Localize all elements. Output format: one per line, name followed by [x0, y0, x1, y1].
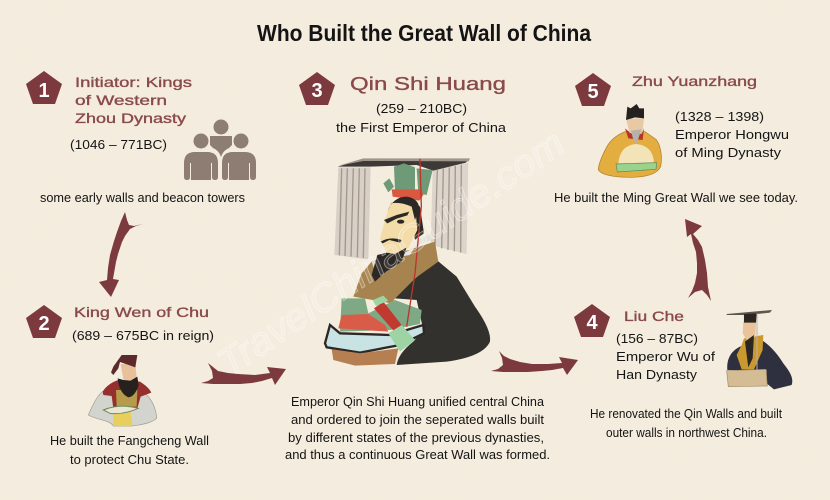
badge 1: 1	[38, 80, 50, 102]
description 3: Emperor Qin Shi Huang unified central China	[291, 394, 545, 409]
heading 2: King Wen of Chu	[74, 304, 209, 320]
dates 1: (1046 – 771BC)	[70, 137, 167, 152]
portrait: King Wen	[88, 355, 157, 426]
heading 5: Zhu Yuanzhang	[632, 73, 757, 89]
title: Who Built the Great Wall of China	[257, 20, 591, 46]
description 2: to protect Chu State.	[70, 452, 189, 467]
icon: group of people	[184, 120, 256, 180]
watermark: TravelChinaGuide.com	[210, 122, 572, 385]
dates 4	[616, 331, 715, 382]
description 2: He built the Fangcheng Wall	[50, 433, 209, 448]
panel: step 1 Western Zhou	[26, 71, 256, 205]
heading 4: Liu Che	[624, 308, 684, 324]
portrait: Qin Shi Huang	[325, 158, 490, 366]
description 4: outer walls in northwest China.	[606, 425, 767, 440]
dates 5: Emperor Hongwu	[675, 127, 789, 142]
portrait: Zhu Yuanzhang	[598, 104, 661, 177]
arrow: step 2 to 3	[201, 363, 286, 385]
arrow: step 4 to 5	[685, 219, 711, 301]
dates 4: Emperor Wu of	[616, 349, 715, 364]
badge 1	[26, 71, 62, 104]
description 1: some early walls and beacon towers	[40, 190, 245, 205]
dates 5: of Ming Dynasty	[675, 145, 781, 160]
badge 4	[574, 304, 610, 337]
badge 2: 2	[38, 313, 50, 335]
description 4	[590, 406, 782, 440]
description 3: and thus a continuous Great Wall was formed.	[285, 447, 550, 462]
description 4: He renovated the Qin Walls and built	[590, 406, 782, 421]
dates 5	[675, 109, 789, 160]
badge 3	[299, 72, 335, 105]
description 2	[50, 433, 209, 467]
description 5: He built the Ming Great Wall we see today.	[554, 190, 798, 205]
portrait: Liu Che	[727, 310, 792, 389]
dates 5: (1328 – 1398)	[675, 109, 764, 124]
heading 1: Zhou Dynasty	[75, 110, 186, 126]
heading 1	[75, 74, 192, 126]
arrow: step 3 to 4	[491, 351, 578, 375]
dates 4: (156 – 87BC)	[616, 331, 698, 346]
dates 3: (259 – 210BC)	[376, 101, 467, 116]
badge 3: 3	[311, 80, 323, 102]
dates 2: (689 – 675BC in reign)	[72, 328, 214, 343]
badge 2	[26, 305, 62, 338]
heading 3: Qin Shi Huang	[350, 74, 506, 94]
dates 4: Han Dynasty	[616, 367, 697, 382]
description 3: and ordered to join the seperated walls built	[291, 412, 544, 427]
panel: step 4 Liu Che	[574, 304, 792, 440]
dates 3	[336, 101, 507, 135]
arrow: step 1 to 2	[99, 212, 143, 297]
panel: step 2 King Wen of Chu	[26, 304, 214, 467]
badge 4: 4	[586, 312, 598, 334]
dates 3: the First Emperor of China	[336, 120, 507, 135]
panel: step 5 Zhu Yuanzhang	[554, 73, 798, 205]
badge 5: 5	[587, 81, 599, 103]
heading 1: Initiator: Kings	[75, 74, 192, 90]
description 3	[285, 394, 550, 462]
panel: step 3 Qin Shi Huang	[285, 72, 550, 462]
badge 5	[575, 73, 611, 106]
description 3: by different states of the previous dynasties,	[288, 430, 544, 445]
heading 1: of Western	[75, 92, 167, 108]
